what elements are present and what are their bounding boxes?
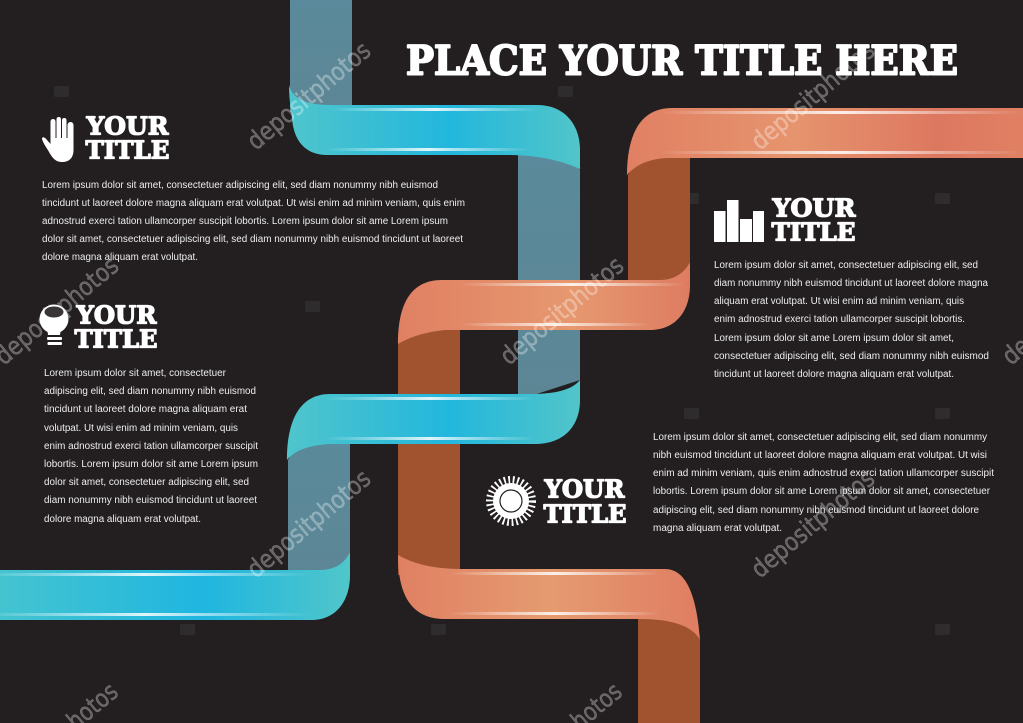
text block: adnostrud exerci tation ullamcorper suscipit lobortis. Lorem ipsum dolor sit ame Lorem ipsum bbox=[42, 216, 448, 227]
text block: dolore magna aliquam erat volutpat. bbox=[44, 514, 201, 525]
text block: enim adnostrud exerci tation ullamcorper suscipit lobortis. bbox=[714, 314, 965, 325]
ribbon: salmon band top bbox=[627, 108, 1023, 175]
text block: tincidunt ut laoreet dolore magna aliquam erat volutpat. Ut wisi enim ad minim veniam, quis enim bbox=[42, 198, 465, 209]
ribbon: teal band middle bbox=[287, 380, 580, 460]
text block: consectetuer adipiscing elit, sed diam nonummy nibh euismod bbox=[714, 351, 989, 362]
text block: dolor sit amet, consectetuer adipiscing elit, sed diam nonummy nibh euismod tincidunt ut laoreet bbox=[42, 234, 463, 245]
section: bulb bbox=[40, 300, 258, 525]
text block: lobortis. Lorem ipsum dolor sit ame Lorem ipsum bbox=[44, 459, 258, 470]
ribbon: salmon band bottom bbox=[398, 555, 700, 640]
section: sun bbox=[492, 432, 994, 534]
text block: Lorem ipsum dolor sit amet, consectetuer adipiscing elit, sed diam nonummy bbox=[653, 432, 987, 443]
heading bbox=[85, 112, 170, 164]
text block: Lorem ipsum dolor sit amet, consectetuer bbox=[44, 368, 227, 379]
icon: sun bbox=[492, 482, 530, 520]
heading: YOUR bbox=[85, 112, 170, 140]
text block bbox=[714, 260, 989, 380]
heading bbox=[771, 194, 857, 246]
text block bbox=[42, 180, 465, 263]
watermarks: depositphotos bbox=[241, 36, 376, 156]
watermarks: depositphotos bbox=[241, 464, 376, 584]
heading: TITLE bbox=[86, 136, 170, 164]
text block: tincidunt ut laoreet dolore magna aliquam erat volutpat. bbox=[714, 369, 954, 380]
icon: bar chart bbox=[714, 200, 764, 242]
text block: Lorem ipsum dolor sit ame Lorem ipsum dolor sit amet, bbox=[714, 333, 954, 344]
watermarks: depositphotos bbox=[494, 251, 629, 371]
heading: YOUR bbox=[75, 300, 158, 330]
heading: TITLE bbox=[772, 218, 856, 246]
text block: aliquam erat volutpat. Ut wisi enim ad minim veniam, quis bbox=[714, 296, 964, 307]
heading: YOUR bbox=[543, 474, 626, 504]
text block: nibh euismod tincidunt ut laoreet dolore magna aliquam erat volutpat. Ut wisi bbox=[653, 450, 987, 461]
section: bars bbox=[714, 194, 989, 380]
text block: adipiscing elit, sed diam nonummy nibh euismod tincidunt ut laoreet dolore bbox=[653, 505, 979, 516]
ribbon: teal band bottom bbox=[0, 552, 350, 620]
heading: YOUR bbox=[771, 194, 857, 222]
heading bbox=[543, 474, 626, 528]
heading: TITLE bbox=[74, 324, 158, 354]
text block: enim ad minim veniam, quis enim adnostrud exerci tation ullamcorper suscipit bbox=[653, 468, 994, 479]
text block: dolore magna aliquam erat volutpat. bbox=[42, 252, 198, 263]
icon: hand bbox=[42, 117, 74, 162]
text block: diam nonummy nibh euismod tincidunt ut laoreet dolore magna bbox=[714, 278, 988, 289]
heading: TITLE bbox=[544, 500, 626, 528]
text block: enim adnostrud exerci tation ullamcorper suscipit bbox=[44, 441, 258, 452]
watermarks: depositphotos bbox=[745, 36, 880, 156]
ribbon: salmon band middle bbox=[398, 262, 690, 344]
text block: magna aliquam erat volutpat. bbox=[653, 523, 782, 534]
ribbon: salmon back strips bbox=[398, 155, 700, 723]
heading bbox=[74, 300, 158, 354]
text block: lobortis. Lorem ipsum dolor sit ame Lorem ipsum dolor sit amet, consectetuer bbox=[653, 486, 991, 497]
icon: light bulb bbox=[40, 304, 68, 345]
faint camera watermarks bbox=[54, 86, 950, 635]
text block: Lorem ipsum dolor sit amet, consectetuer adipiscing elit, sed diam nonummy nibh euismod bbox=[42, 180, 438, 191]
title: PLACE YOUR TITLE HERE bbox=[406, 38, 958, 84]
text block: adipiscing elit, sed diam nonummy nibh euismod bbox=[44, 386, 256, 397]
watermarks: depositphotos bbox=[745, 464, 880, 584]
text block bbox=[653, 432, 994, 534]
text block: diam nonummy nibh euismod tincidunt ut laoreet bbox=[44, 495, 257, 506]
section: hand bbox=[42, 112, 465, 263]
text block: tincidunt ut laoreet dolore magna aliquam erat bbox=[44, 404, 247, 415]
text block bbox=[44, 368, 258, 525]
ribbon: teal back strips bbox=[288, 0, 580, 575]
ribbon: teal band top bbox=[289, 85, 580, 169]
text block: volutpat. Ut wisi enim ad minim veniam, quis bbox=[44, 423, 238, 434]
text block: dolor sit amet, consectetuer adipiscing elit, sed bbox=[44, 477, 249, 488]
text block: Lorem ipsum dolor sit amet, consectetuer adipiscing elit, sed bbox=[714, 260, 978, 271]
